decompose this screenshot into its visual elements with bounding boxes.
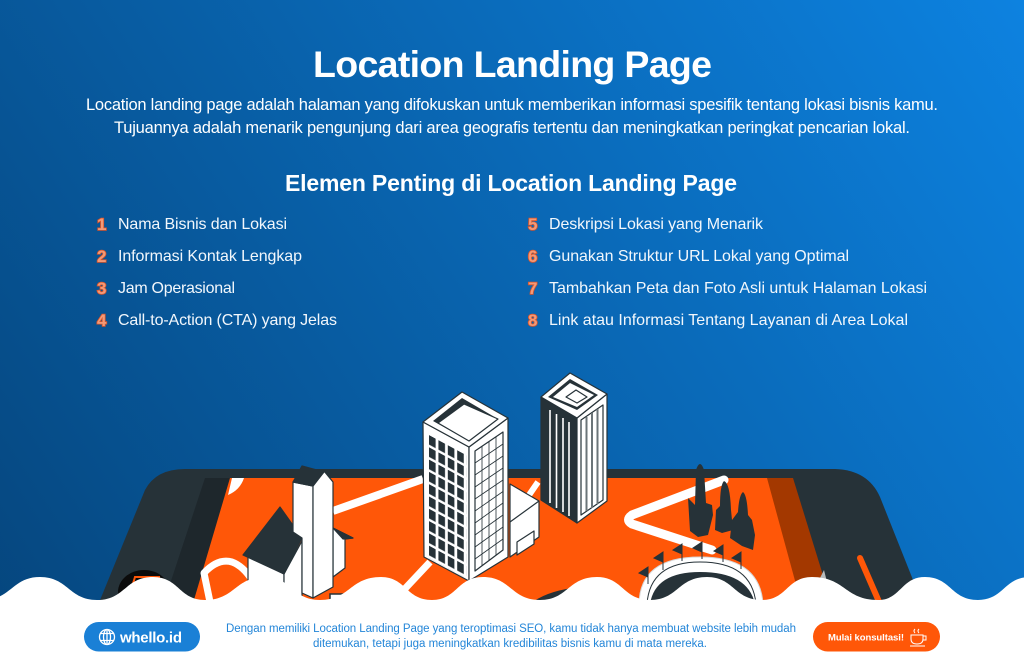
- item 3: 3: [97, 279, 106, 298]
- trees: [688, 464, 755, 550]
- item 7: Tambahkan Peta dan Foto Asli untuk Halaman Lokasi: [549, 280, 927, 297]
- section heading: Elemen Penting di Location Landing Page: [285, 170, 737, 196]
- church building: [243, 466, 353, 605]
- intro paragraph: Tujuannya adalah menarik pengunjung dari area geografis tertentu dan meningkatkan peringkat pencarian lokal.: [114, 119, 910, 137]
- item 2: 2: [97, 247, 106, 266]
- tower: grid office: [423, 392, 539, 581]
- phone camera badge: [118, 570, 170, 614]
- list: left column: [97, 215, 337, 330]
- footer message: [226, 623, 796, 650]
- intro paragraph: [86, 96, 938, 137]
- icon: coffee cup: [910, 629, 926, 646]
- footer wave: [0, 577, 1024, 668]
- map roads: [204, 478, 724, 602]
- tower: striped office: [541, 373, 607, 523]
- website button: whello.id: [119, 630, 182, 646]
- stadium: [639, 542, 763, 604]
- title: Location Landing Page: [313, 43, 712, 85]
- item 4: 4: [97, 311, 107, 330]
- flags: [639, 542, 741, 584]
- item 1: 1: [97, 215, 106, 234]
- illustration: phone with city map: [96, 373, 925, 614]
- consultation button: [813, 622, 940, 652]
- map side band: [767, 478, 826, 610]
- icon: globe: [100, 630, 114, 644]
- map screen: [191, 478, 805, 610]
- intro paragraph: Location landing page adalah halaman yang difokuskan untuk memberikan informasi spesifik tentang lokasi bisnis kamu.: [86, 96, 938, 114]
- footer message: ditemukan, tetapi juga meningkatkan kredibilitas bisnis kamu di mata mereka.: [313, 638, 707, 650]
- phone body: [96, 469, 925, 610]
- bottom dark road detail: [530, 588, 572, 604]
- list: right column: [528, 215, 927, 330]
- item 8: 8: [528, 311, 537, 330]
- item 6: Gunakan Struktur URL Lokal yang Optimal: [549, 248, 849, 265]
- website button: [84, 622, 200, 652]
- grey corner: [814, 570, 829, 590]
- item 3: Jam Operasional: [118, 280, 235, 297]
- item 8: Link atau Informasi Tentang Layanan di Area Lokal: [549, 312, 908, 329]
- item 5: Deskripsi Lokasi yang Menarik: [549, 216, 764, 233]
- item 4: Call-to-Action (CTA) yang Jelas: [118, 312, 337, 329]
- item 2: Informasi Kontak Lengkap: [118, 248, 302, 265]
- phone home bar: [860, 558, 880, 604]
- small kiosk: [330, 594, 344, 600]
- item 1: Nama Bisnis dan Lokasi: [118, 216, 287, 233]
- phone inner shadow strip: [168, 478, 232, 610]
- footer message: Dengan memiliki Location Landing Page yang teroptimasi SEO, kamu tidak hanya membuat website lebih mudah: [226, 623, 796, 635]
- item 6: 6: [528, 247, 537, 266]
- consultation button: Mulai konsultasi!: [828, 632, 904, 644]
- item 7: 7: [528, 279, 537, 298]
- item 5: 5: [528, 215, 537, 234]
